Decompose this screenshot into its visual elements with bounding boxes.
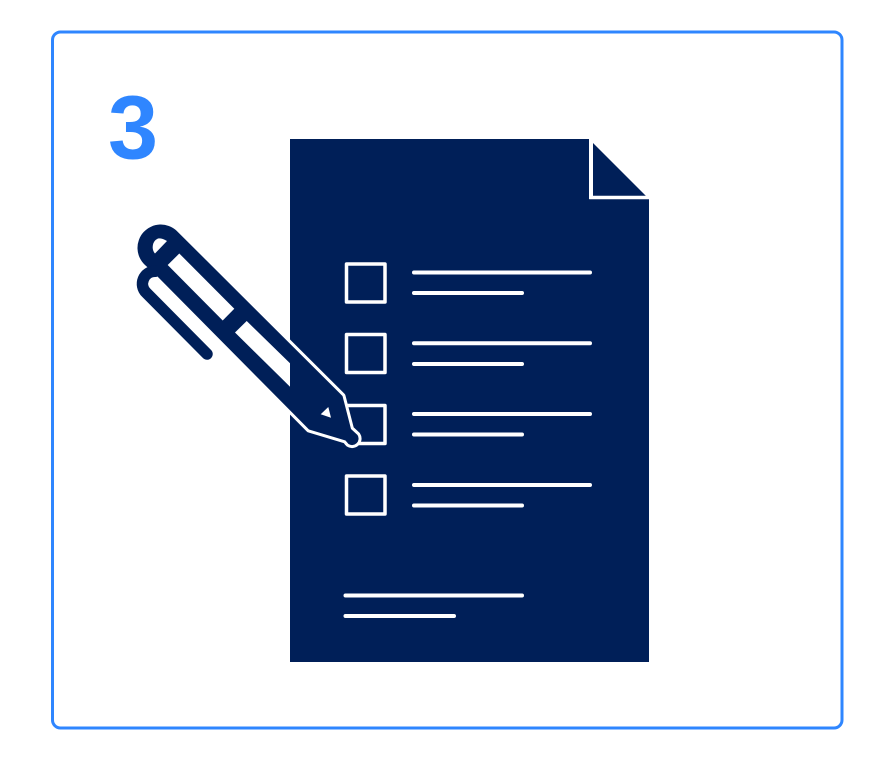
document icon xyxy=(290,139,649,662)
footer lines xyxy=(346,596,522,616)
pen lower window xyxy=(235,321,290,387)
pen upper window xyxy=(168,254,234,320)
checklist row 2 xyxy=(346,334,590,372)
checklist row 1 xyxy=(346,264,590,302)
checklist row 3 xyxy=(346,406,590,444)
step number: 3 xyxy=(108,78,158,178)
pen clip xyxy=(142,271,207,354)
pen body xyxy=(137,225,359,445)
pen icon xyxy=(137,225,359,445)
folded corner xyxy=(591,139,649,198)
checklist row 4 xyxy=(346,476,590,514)
pen nib slit xyxy=(321,407,331,418)
pen cap hole xyxy=(153,238,167,254)
document page xyxy=(290,139,649,662)
